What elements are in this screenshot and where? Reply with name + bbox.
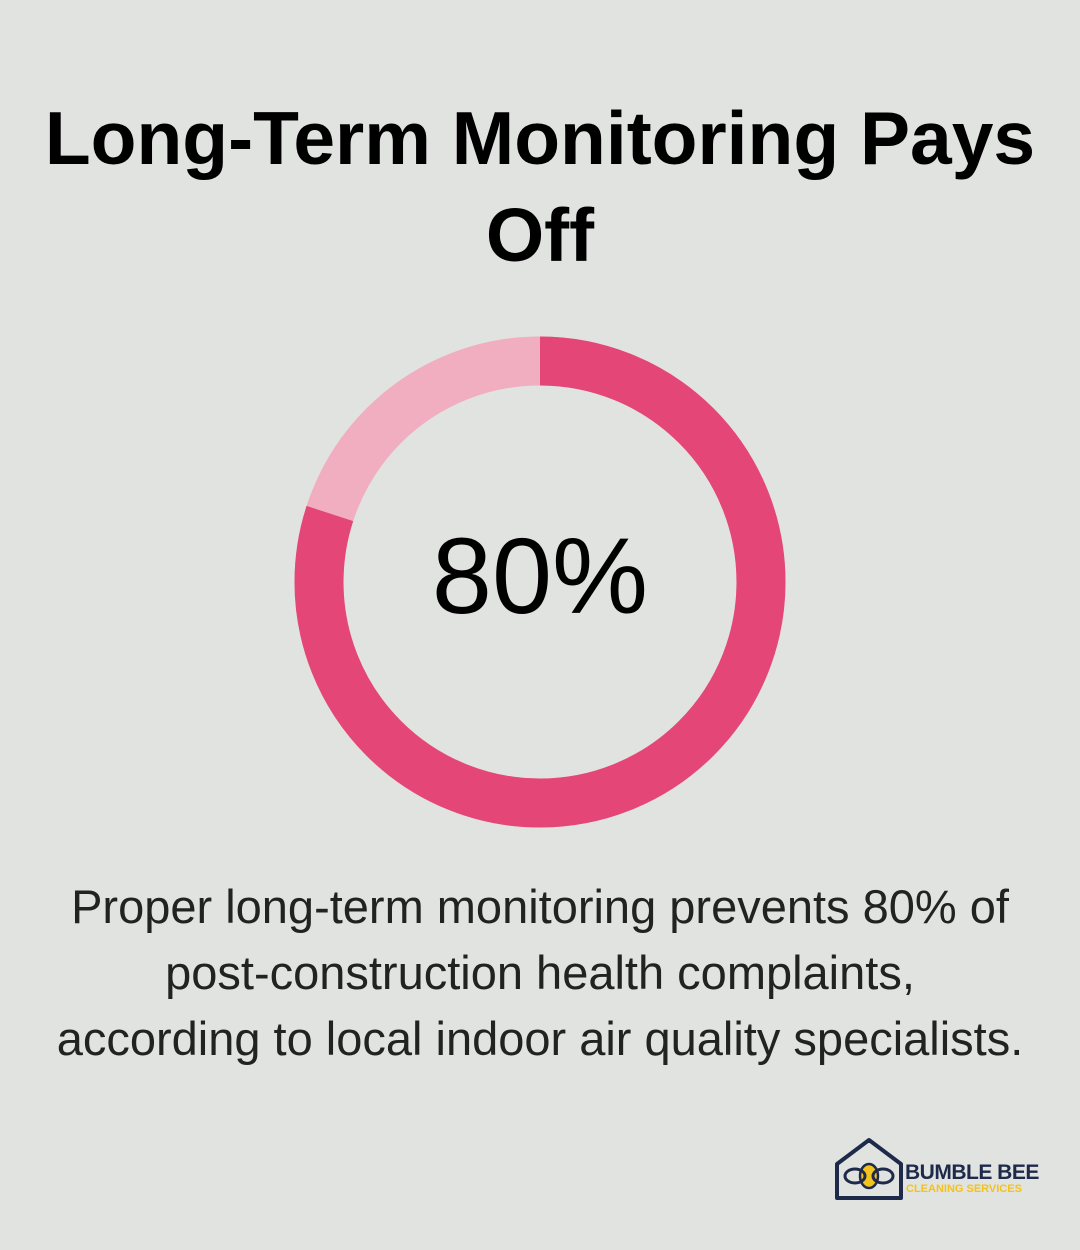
title [45,96,1035,277]
title: Off [486,193,594,277]
body text: according to local indoor air quality specialists. [57,1012,1023,1065]
donut chart: 80% [432,515,648,636]
logo: BUMBLE BEE [905,1161,1039,1184]
body text [57,880,1023,1065]
body text: Proper long-term monitoring prevents 80% of [71,880,1009,933]
title: Long-Term Monitoring Pays [45,96,1035,180]
logo [835,1138,1039,1200]
body text: post-construction health complaints, [165,946,915,999]
logo: CLEANING SERVICES [906,1183,1022,1195]
